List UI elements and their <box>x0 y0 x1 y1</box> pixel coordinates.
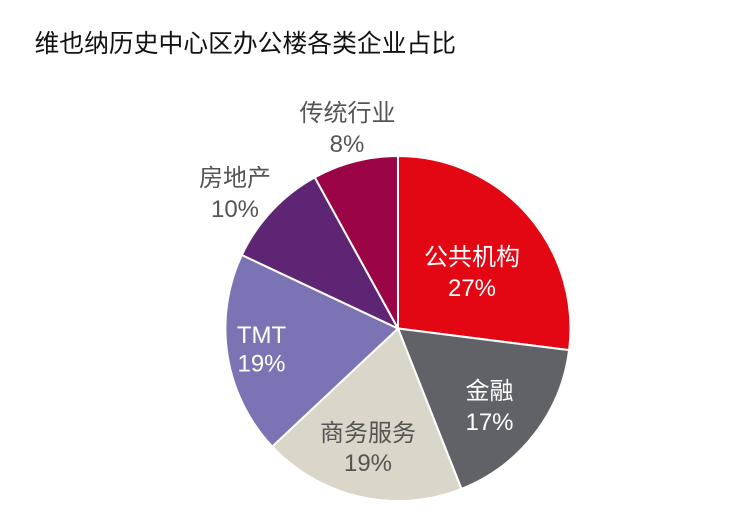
label: 传统行业 8%: 8% <box>330 131 364 158</box>
label: 商务服务 19% <box>320 420 416 477</box>
pie chart <box>225 156 570 501</box>
label: 金融 17%: 17% <box>465 409 514 436</box>
slice: 传统行业 8% <box>315 156 398 328</box>
label: 公共机构 27% <box>424 244 520 302</box>
label: TMT 19%: TMT <box>237 322 286 349</box>
label: 金融 17%: 金融 <box>466 378 514 405</box>
label: TMT 19%: 19% <box>237 350 286 378</box>
slice: 公共机构 27% <box>398 156 570 350</box>
label: 公共机构 27%: 27% <box>448 275 496 302</box>
slice: TMT 19% <box>225 255 398 447</box>
slice: 金融 17% <box>398 328 569 489</box>
label: 商务服务 19%: 商务服务 <box>320 420 416 447</box>
label: 商务服务 19%: 19% <box>344 450 392 477</box>
label: 金融 17% <box>465 378 514 436</box>
label: TMT 19% <box>237 322 286 378</box>
label: 房地产 10%: 房地产 <box>199 165 271 192</box>
label: 房地产 10% <box>199 165 271 223</box>
label: 房地产 10%: 10% <box>211 196 259 223</box>
title: 维也纳历史中心区办公楼各类企业占比 <box>34 30 456 58</box>
label: 公共机构 27%: 公共机构 <box>424 244 520 271</box>
slice: 商务服务 19% <box>272 328 461 501</box>
label: 传统行业 8% <box>300 100 396 158</box>
label: 传统行业 8%: 传统行业 <box>300 100 396 127</box>
slice: 房地产 10% <box>242 177 398 328</box>
